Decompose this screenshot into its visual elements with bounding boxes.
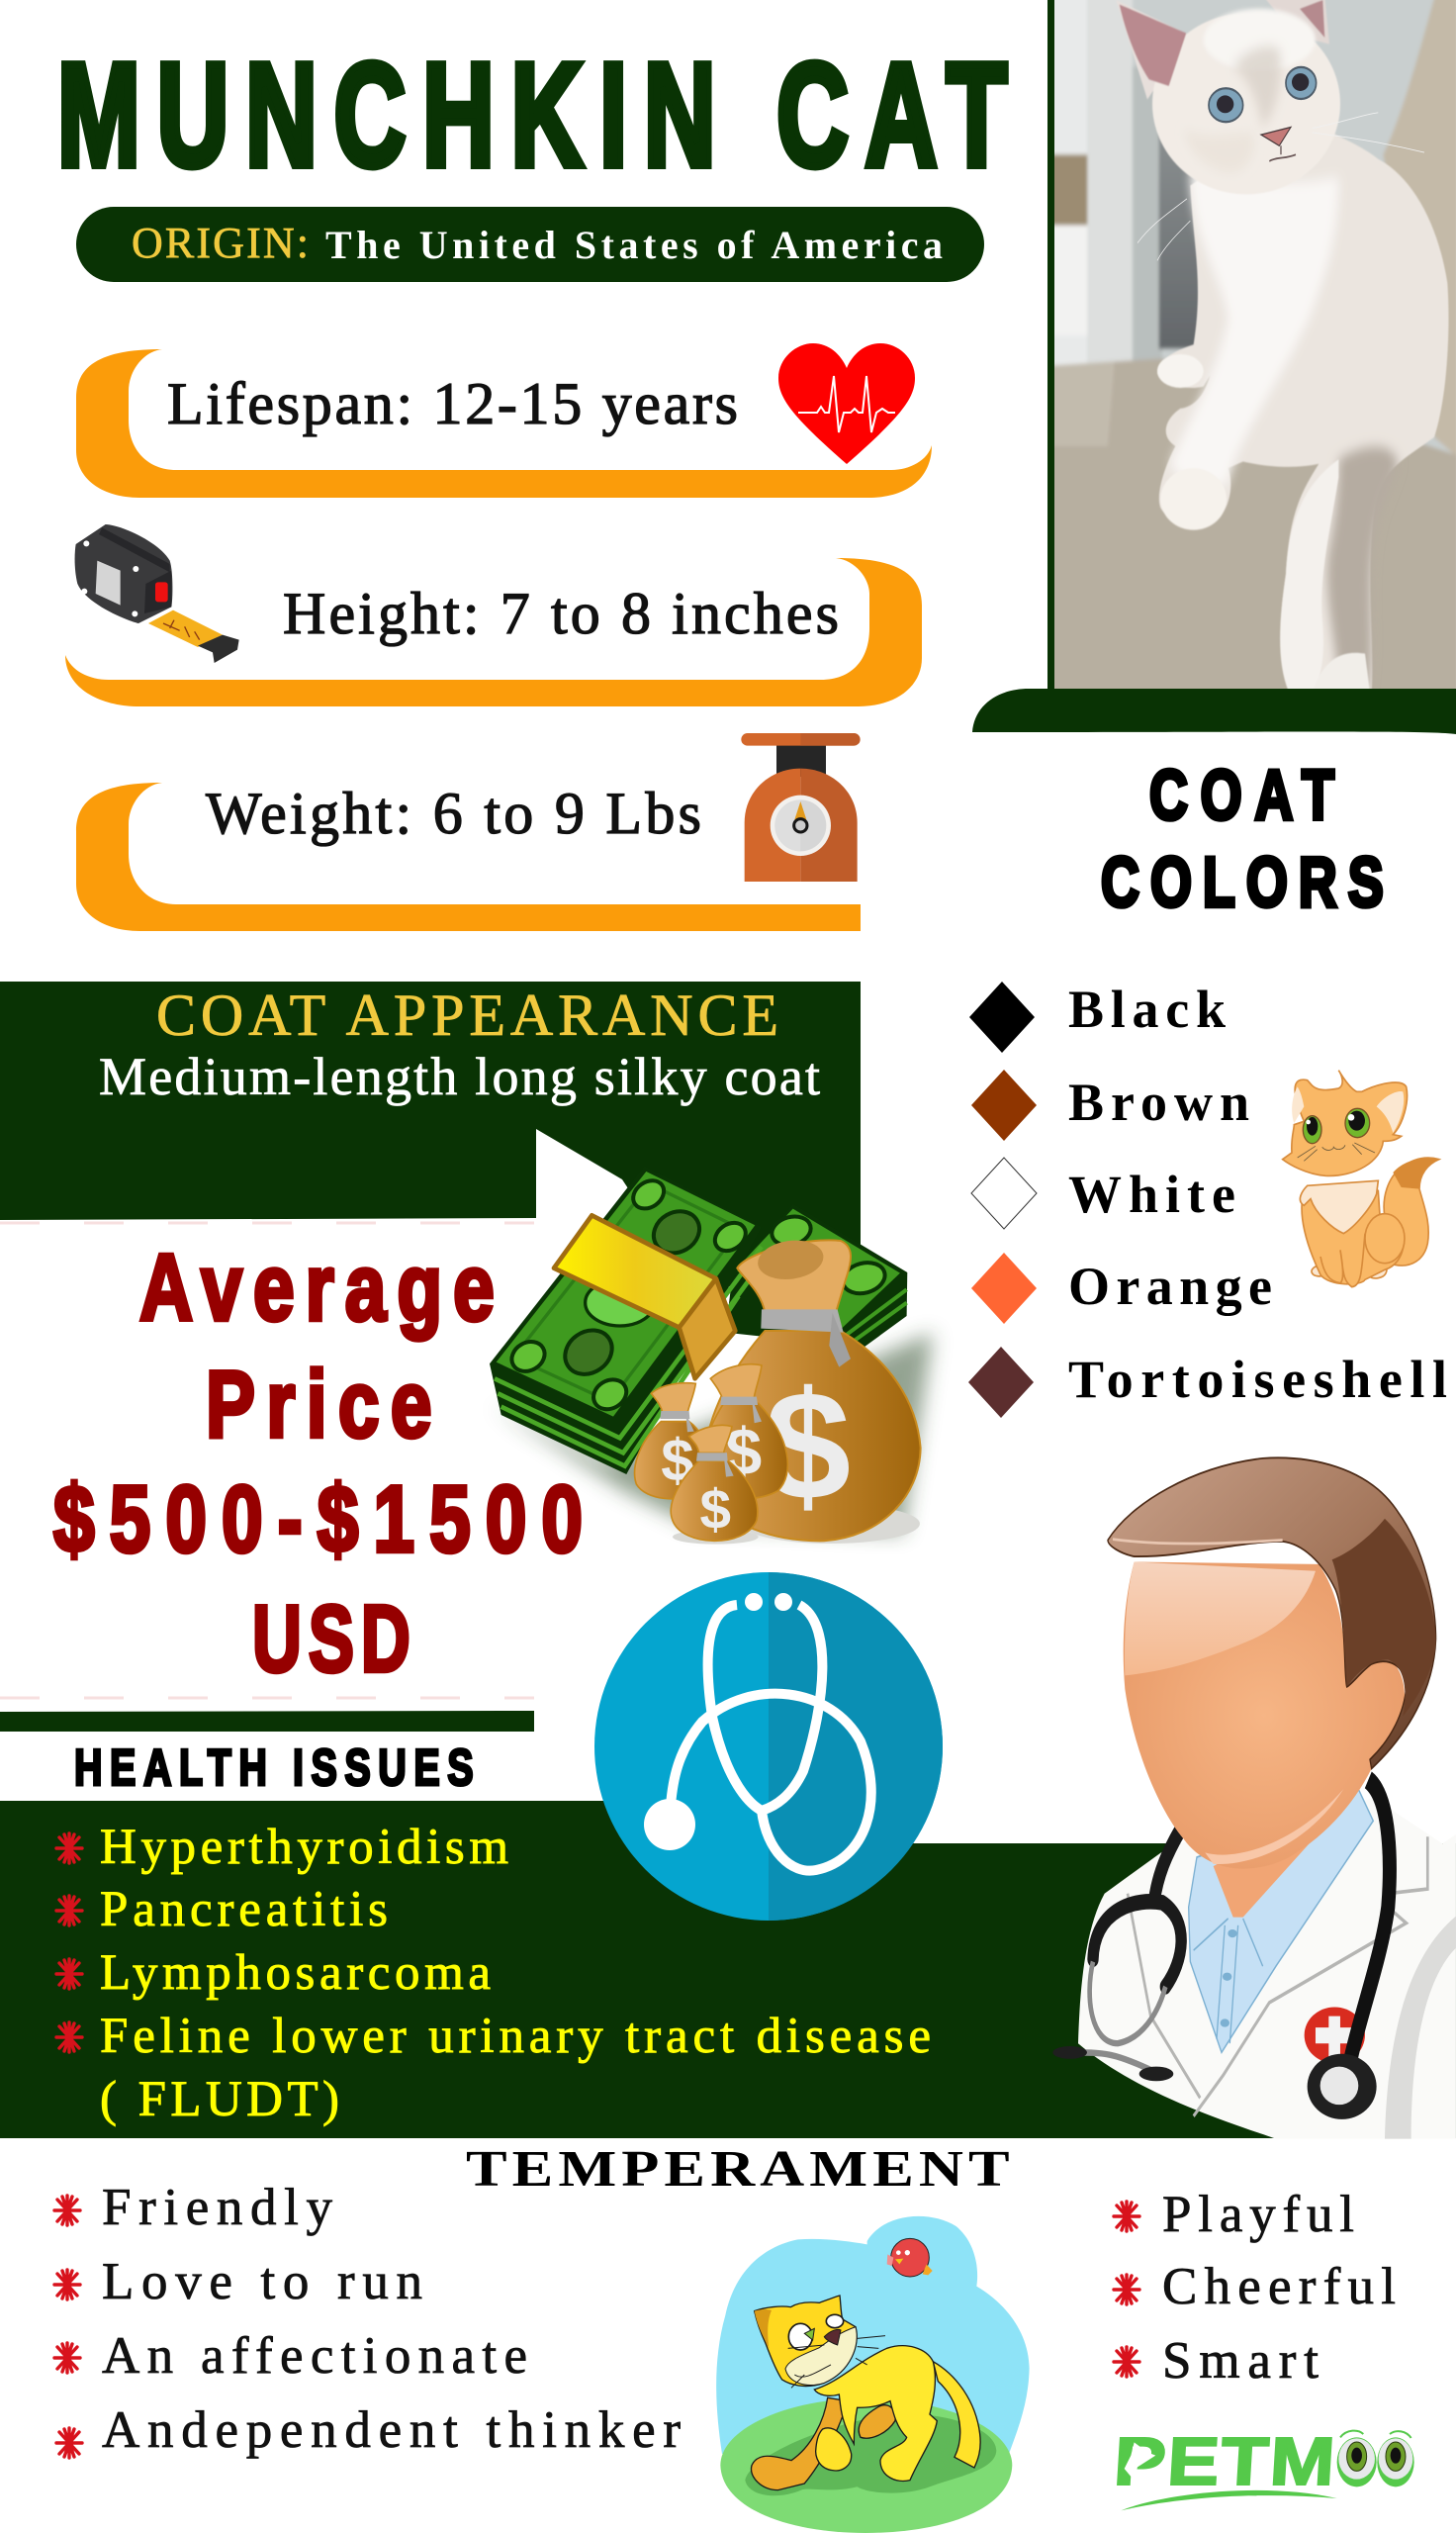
health issues list: Hyperthyroidism [100, 1820, 508, 1875]
left small money bag [635, 1383, 709, 1499]
temperament list left: Friendly [102, 2179, 332, 2236]
heading: coat colors: COAT [1149, 757, 1334, 835]
origin value: The United States of America [325, 223, 943, 267]
temperament list left: Love to run [102, 2253, 422, 2310]
cat front paw [816, 2428, 852, 2471]
faint dashed artefacts [0, 1223, 534, 1698]
temperament list left: Andependent thinker [102, 2401, 681, 2459]
stethoscope [1071, 1829, 1181, 2073]
medium money bag: $ [725, 1416, 762, 1489]
illustration: orange kitten [1283, 1071, 1439, 1287]
swatch: tortoiseshell [968, 1347, 1447, 1418]
shadow [745, 2414, 996, 2495]
cat back legs and tail [751, 2362, 980, 2490]
big money bag [704, 1237, 921, 1544]
health issues list: Feline lower urinary tract disease [100, 2009, 931, 2064]
grass [720, 2398, 1012, 2533]
cat photo [1039, 0, 1456, 711]
average price: $500-$1500 [53, 1466, 583, 1572]
swatch: white: White [1068, 1165, 1235, 1224]
icon: tape measure [75, 524, 239, 663]
average price: Price [206, 1352, 432, 1457]
heading: coat colors: COLORS [1101, 844, 1384, 922]
front small money bag [671, 1425, 759, 1545]
temperament bullets right [1114, 2202, 1139, 2377]
swatch: white [971, 1158, 1235, 1229]
temperament list left [102, 2179, 681, 2459]
chest piece [1308, 2054, 1377, 2119]
coat appearance heading: COAT APPEARANCE [156, 983, 778, 1048]
illustration: yellow cat and bird [716, 2216, 1030, 2533]
cat body [814, 2346, 937, 2481]
coat appearance text: Medium-length long silky coat [99, 1047, 820, 1106]
cat eyes, nose and whiskers [1138, 67, 1424, 260]
shirt [1189, 1789, 1373, 2052]
temperament bullets left [54, 2196, 82, 2458]
health issues list: Lymphosarcoma [100, 1945, 491, 2001]
heading: coat colors [1101, 757, 1384, 922]
icon: stethoscope circle [594, 1572, 943, 1921]
bird [887, 2238, 933, 2277]
heading: health issues: HEALTH ISSUES [74, 1738, 474, 1796]
health bullets [56, 1833, 82, 2052]
health section background [0, 1711, 1456, 2138]
origin pill [76, 207, 984, 282]
temperament list right [1162, 2186, 1396, 2390]
icon: heart with pulse [778, 343, 915, 464]
hair [1108, 1457, 1436, 1768]
front small money bag: $ [700, 1479, 731, 1542]
logo: petmoo: PETM [1112, 2423, 1337, 2499]
panel: lifespan [76, 343, 932, 498]
title: MUNCHKIN CAT [57, 33, 1007, 197]
swatch: brown: Brown [1068, 1073, 1249, 1132]
panel: height [65, 524, 922, 706]
average price [53, 1235, 583, 1692]
weight text: Weight: 6 to 9 Lbs [206, 781, 701, 846]
sky [716, 2216, 1030, 2454]
swatch: brown [971, 1070, 1249, 1141]
logo: petmoo [1112, 2423, 1414, 2510]
medium money bag [703, 1364, 787, 1498]
health issues list: Pancreatitis [100, 1882, 388, 1937]
average price: Average [139, 1235, 495, 1341]
panel: coat appearance background [0, 982, 861, 1286]
badge [1305, 2007, 1365, 2063]
temperament list right: Cheerful [1162, 2258, 1396, 2315]
average price: USD [252, 1585, 410, 1692]
green base bar [972, 689, 1456, 734]
cat body [1116, 0, 1448, 693]
temperament list right: Smart [1162, 2332, 1319, 2390]
temperament list right: Playful [1162, 2186, 1354, 2243]
swatch: black: Black [1068, 980, 1226, 1039]
swatch: tortoiseshell: Tortoiseshell [1068, 1350, 1447, 1409]
heading: temperament: TEMPERAMENT [466, 2141, 1010, 2198]
height text: Height: 7 to 8 inches [283, 581, 839, 646]
swatch: orange [971, 1253, 1272, 1324]
face [1124, 1562, 1405, 1869]
swatch: orange: Orange [1068, 1257, 1272, 1316]
panel: weight [76, 733, 861, 931]
origin label: ORIGIN: [132, 219, 309, 267]
paper band [554, 1215, 735, 1378]
front bills [490, 1166, 762, 1474]
photo left border [1047, 0, 1054, 689]
illustration: money and bags [490, 1166, 933, 1545]
big money bag: $ [765, 1360, 851, 1533]
swatch: black [969, 980, 1226, 1053]
cat head [755, 2296, 885, 2388]
icon: weighing scale [741, 733, 861, 882]
left small money bag: $ [661, 1428, 694, 1494]
eyes [1337, 2431, 1414, 2486]
neck [1214, 1789, 1358, 1918]
coat color legend [968, 980, 1447, 1418]
health issues list [100, 1820, 931, 2127]
lifespan text: Lifespan: 12-15 years [167, 371, 738, 436]
money shadow [492, 1333, 933, 1534]
back bills [725, 1204, 907, 1348]
health issues list: ( FLUDT) [100, 2072, 339, 2127]
temperament list left: An affectionate [102, 2327, 527, 2385]
coat [1078, 1798, 1456, 2139]
illustration: doctor [1052, 1457, 1456, 2139]
